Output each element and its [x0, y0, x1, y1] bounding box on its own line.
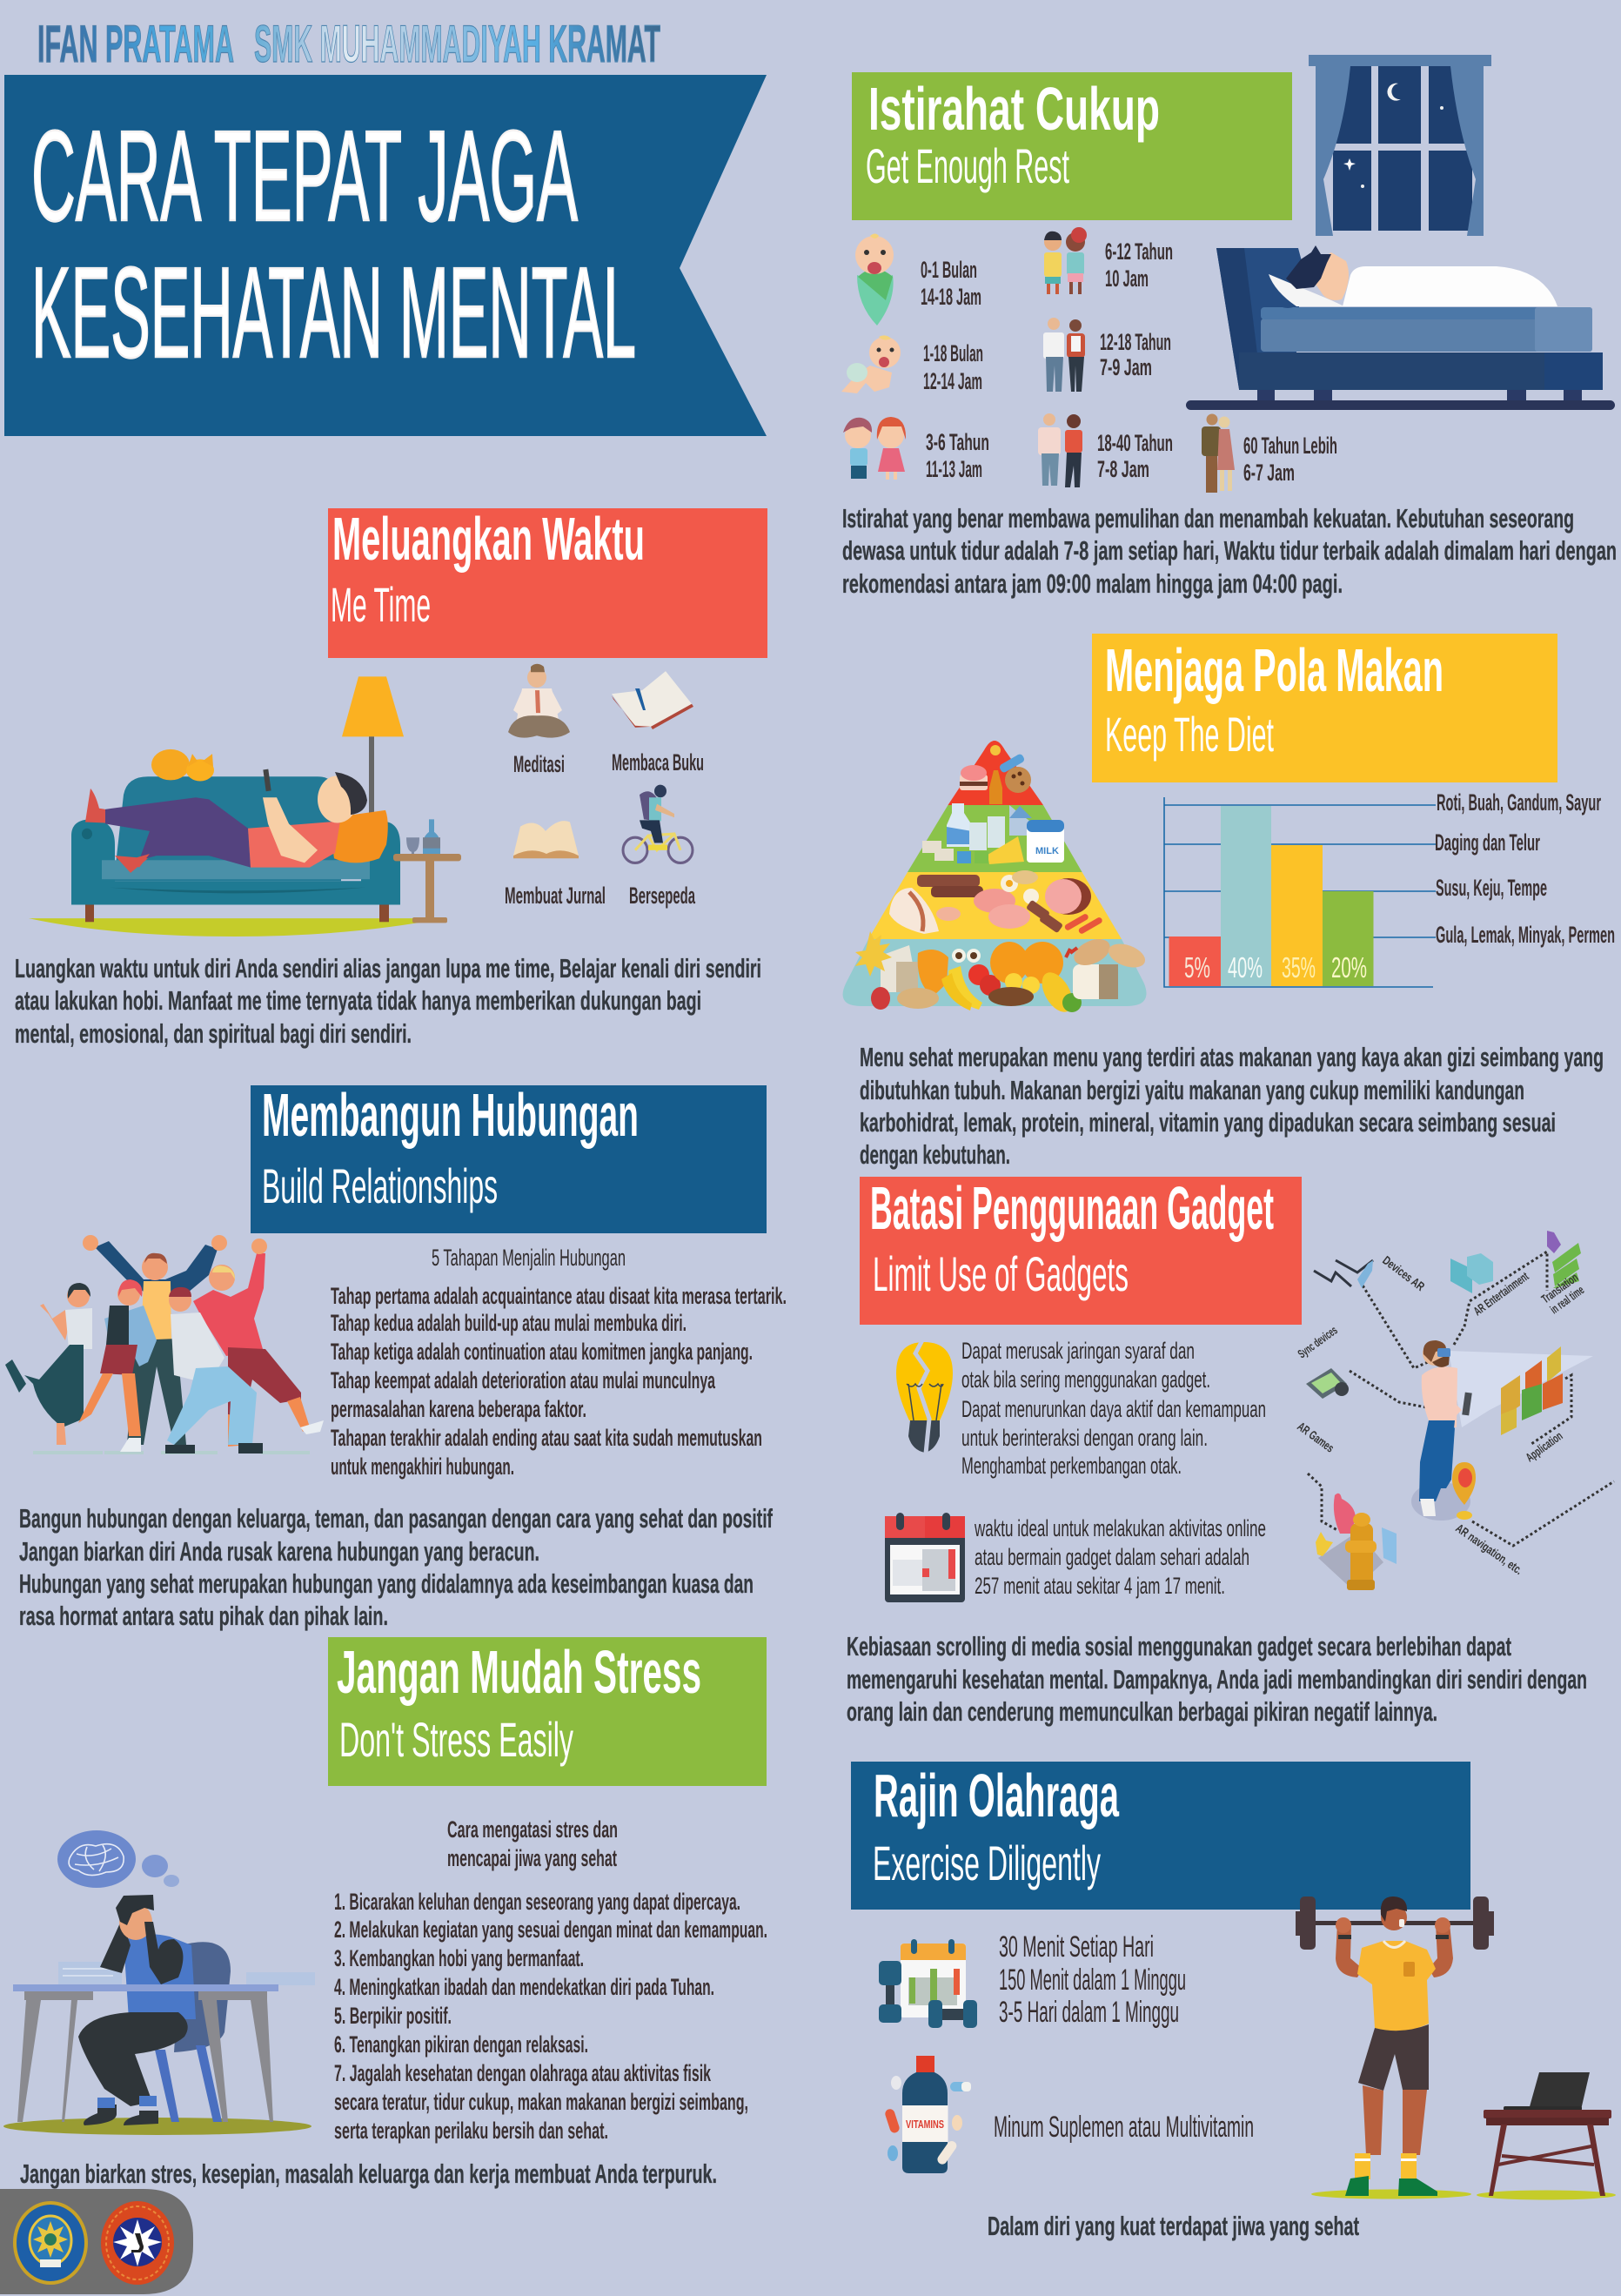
text: exercise frequency	[999, 1930, 1186, 2029]
heading: meluangkan waktu: Me Time	[331, 577, 431, 632]
AR labels: AR Games	[1295, 1419, 1337, 1455]
location pin	[1452, 1462, 1476, 1520]
bar: 5%: 5%	[1184, 951, 1210, 984]
chart labels: Daging dan Telur	[1435, 829, 1540, 856]
label: bersepeda: Bersepeda	[629, 883, 696, 909]
label: membuat jurnal: Membuat Jurnal	[505, 883, 606, 909]
icon: vitamin bottle	[884, 2056, 971, 2173]
paragraph: diet	[860, 1042, 1604, 1170]
text: ideal online time: waktu ideal untuk melakukan aktivitas online	[974, 1515, 1266, 1541]
application tiles	[1501, 1346, 1563, 1435]
list: stress tips: 1. Bicarakan keluhan dengan seseorang yang dapat dipercaya.	[334, 1889, 740, 1915]
age group: 1-18 bulan	[841, 335, 983, 394]
illustration: night window	[1309, 55, 1491, 236]
closing tagline: Dalam diri yang kuat terdapat jiwa yang sehat	[988, 2211, 1359, 2241]
icon: cyclist	[623, 785, 693, 863]
list: stress tips: 7. Jagalah kesehatan dengan olahraga atau aktivitas fisik	[334, 2060, 712, 2086]
illustration: sleeping person in bed	[1186, 245, 1615, 410]
text: gadget effects: Dapat menurunkan daya aktif dan kemampuan	[961, 1396, 1266, 1422]
illustration: stressed person at desk	[3, 1830, 315, 2135]
heading: batasi penggunaan gadget	[860, 1174, 1302, 1325]
age group: 60 tahun lebih	[1202, 414, 1337, 493]
illustration: weightlifter	[1296, 1897, 1494, 2199]
age group: 18-40 tahun: 18-40 Tahun	[1097, 430, 1173, 456]
age group: 12-18 tahun: 7-9 Jam	[1100, 354, 1152, 380]
age group: 3-6 tahun	[843, 417, 989, 482]
pink hair woman	[78, 1279, 157, 1452]
age group: 3-6 tahun: 11-13 Jam	[926, 456, 982, 482]
subheading: cara mengatasi	[447, 1816, 618, 1871]
heading: jangan mudah stress	[328, 1637, 767, 1786]
title banner: CARA TEPAT JAGA	[31, 104, 578, 248]
age group: 6-12 tahun: 10 Jam	[1105, 265, 1149, 292]
paragraph: rest	[842, 503, 1617, 599]
bar: 20%	[1323, 891, 1373, 986]
heading: menjaga pola makan	[1092, 634, 1557, 782]
paragraph: stress: Jangan biarkan stres, kesepian, masalah keluarga dan kerja membuat Anda terpuruk.	[20, 2158, 717, 2189]
bar: 35%: 35%	[1282, 951, 1316, 984]
age group: 6-12 tahun: 6-12 Tahun	[1105, 238, 1173, 265]
panel: exercise	[851, 1762, 1616, 2241]
top tier food	[960, 745, 1031, 804]
cap friend	[165, 1287, 263, 1453]
panel: diet	[843, 634, 1615, 1170]
panel: rest	[841, 55, 1617, 599]
logo: stikes	[13, 2201, 88, 2285]
age group: 18-40 tahun	[1038, 413, 1173, 487]
text: supplement: Minum Suplemen atau Multivitamin	[994, 2111, 1254, 2144]
icon: journal	[513, 821, 579, 858]
list: stress tips: serta terapkan perilaku bersih dan sehat.	[334, 2118, 608, 2144]
center man	[83, 1235, 227, 1445]
list: stress tips: secara teratur, tidur cukup, makan makanan bergizi seimbang,	[334, 2089, 748, 2115]
AR labels: AR Entertainment	[1470, 1269, 1531, 1318]
paragraph: relationships: Hubungan yang sehat merupakan hubungan yang didalamnya ada keseimbangan kuasa dan	[19, 1568, 754, 1599]
text: gadget effects: Dapat merusak jaringan syaraf dan	[961, 1338, 1195, 1364]
paragraph: me time: mental, emosional, dan spiritual bagi diri sendiri.	[15, 1018, 412, 1049]
logo panel	[0, 2189, 193, 2294]
subheading: 5 stages: 5 Tahapan Menjalin Hubungan	[432, 1245, 626, 1271]
panel: stress	[3, 1637, 767, 2189]
illustration: table and laptop	[1477, 2072, 1616, 2200]
bar: 20%: 20%	[1331, 951, 1367, 984]
panel: gadgets	[847, 1174, 1614, 1727]
panel: relationships	[5, 1081, 787, 1631]
author line	[37, 15, 660, 73]
age group: 1-18 bulan: 1-18 Bulan	[923, 340, 983, 366]
label: meditasi: Meditasi	[513, 751, 565, 777]
text: gadget effects	[961, 1338, 1266, 1479]
heading: membangun hubungan	[251, 1081, 767, 1233]
heading: membangun hubungan: Membangun Hubungan	[262, 1081, 639, 1149]
person with headset	[1411, 1340, 1472, 1521]
icon: schedule and dumbbells	[879, 1939, 977, 2028]
title banner: KESEHATAN MENTAL	[31, 241, 636, 385]
dairy tier food: MILK	[1035, 846, 1059, 856]
icon: vitamin bottle: VITAMINS	[906, 2118, 944, 2131]
list: relationship stages: untuk mengakhiri hubungan.	[331, 1453, 514, 1480]
paragraph: me time	[15, 953, 761, 1049]
age group: 0-1 bulan: 14-18 Jam	[921, 284, 981, 310]
subheading: cara mengatasi: mencapai jiwa yang sehat	[447, 1845, 617, 1871]
AR labels: in real time	[1547, 1283, 1586, 1316]
illustration: man on sofa	[29, 676, 461, 937]
chart labels	[1435, 789, 1615, 948]
age group: 12-18 tahun: 12-18 Tahun	[1100, 329, 1171, 355]
author line: SMK MUHAMMADIYAH KRAMAT	[254, 15, 660, 73]
paragraph: rest: rekomendasi antara jam 09:00 malam hingga jam 04:00 pagi.	[842, 568, 1343, 599]
list: stress tips: 2. Melakukan kegiatan yang sesuai dengan minat dan kemampuan.	[334, 1917, 767, 1943]
author line: IFAN PRATAMA	[37, 15, 234, 73]
icon: book	[612, 671, 693, 729]
subheading: cara mengatasi: Cara mengatasi stres dan	[447, 1816, 618, 1843]
heading: istirahat cukup	[852, 72, 1292, 220]
bar: 5%	[1169, 937, 1221, 986]
heading: istirahat cukup: Get Enough Rest	[866, 138, 1069, 193]
bar: 35%	[1271, 845, 1323, 986]
heading: menjaga pola makan: Keep The Diet	[1105, 707, 1274, 762]
base tier food	[855, 931, 1149, 1017]
age group: 60 tahun lebih: 60 Tahun Lebih	[1243, 433, 1337, 459]
age group: 3-6 tahun: 3-6 Tahun	[926, 429, 989, 455]
paragraph: diet: dengan kebutuhan.	[860, 1139, 1010, 1170]
text: ideal online time: atau bermain gadget dalam sehari adalah	[975, 1544, 1249, 1570]
list: relationship stages: Tahapan terakhir adalah ending atau saat kita sudah memutuskan	[331, 1425, 762, 1451]
age group: 0-1 bulan: 0-1 Bulan	[921, 257, 977, 283]
red hoodie friend	[193, 1239, 324, 1447]
list: relationship stages: Tahap keempat adalah deterioration atau mulai munculnya	[331, 1367, 716, 1393]
age group: 60 tahun lebih: 6-7 Jam	[1243, 460, 1295, 486]
illustration: food pyramid	[843, 741, 1149, 1017]
icon: broken light bulb	[896, 1340, 953, 1453]
heading: batasi penggunaan gadget: Limit Use of Gadgets	[873, 1246, 1129, 1301]
heading: istirahat cukup: Istirahat Cukup	[868, 75, 1160, 143]
list: stress tips: 4. Meningkatkan ibadah dan mendekatkan diri pada Tuhan.	[334, 1974, 714, 2000]
age group: 1-18 bulan: 12-14 Jam	[923, 368, 982, 394]
paragraph: relationships: Bangun hubungan dengan keluarga, teman, dan pasangan dengan cara yang sehat dan positif	[19, 1503, 773, 1534]
text: gadget effects: otak bila sering menggunakan gadget.	[961, 1366, 1210, 1393]
heading: membangun hubungan: Build Relationships	[262, 1158, 498, 1213]
AR labels: Translation	[1538, 1270, 1581, 1306]
list: relationship stages: Tahap pertama adalah acquaintance atau disaat kita merasa tertarik.	[331, 1283, 787, 1309]
list: relationship stages	[331, 1283, 787, 1480]
AR labels: Sync devices	[1295, 1323, 1340, 1360]
age group: 12-18 tahun	[1043, 318, 1171, 392]
heading: jangan mudah stress: Jangan Mudah Stress	[337, 1638, 701, 1706]
age group: 6-12 tahun	[1044, 227, 1173, 294]
list: stress tips	[334, 1889, 767, 2144]
text: ideal online time	[974, 1515, 1266, 1599]
text: gadget effects: untuk berinteraksi dengan orang lain.	[961, 1425, 1208, 1451]
text: gadget effects: Menghambat perkembangan otak.	[961, 1453, 1182, 1479]
bar: 40%	[1221, 806, 1271, 986]
heading: rajin olahraga: Rajin Olahraga	[874, 1762, 1120, 1829]
list: stress tips: 5. Berpikir positif.	[334, 2003, 452, 2029]
age group: 0-1 bulan	[855, 233, 981, 326]
left woman	[5, 1283, 92, 1445]
game hydrant and character	[1316, 1494, 1397, 1590]
bar chart: food portions	[1164, 789, 1615, 987]
icon: meditation	[508, 664, 570, 738]
paragraph: me time: atau lakukan hobi. Manfaat me time ternyata tidak hanya memberikan dukungan bagi	[15, 985, 701, 1016]
logo: smk muhammadiyah	[101, 2201, 174, 2285]
icon: calendar	[885, 1513, 965, 1602]
AR labels	[1295, 1253, 1586, 1577]
list: stress tips: 6. Tenangkan pikiran dengan relaksasi.	[334, 2031, 588, 2058]
text: exercise frequency: 3-5 Hari dalam 1 Minggu	[999, 1996, 1179, 2029]
paragraph: relationships: rasa hormat antara satu pihak dan pihak lain.	[19, 1601, 388, 1631]
phone and watch	[1306, 1368, 1349, 1399]
heading: meluangkan waktu: Meluangkan Waktu	[332, 505, 645, 573]
heading: jangan mudah stress: Don't Stress Easily	[339, 1712, 573, 1767]
AR labels: Devices AR	[1380, 1253, 1428, 1293]
paragraph: me time: Luangkan waktu untuk diri Anda sendiri alias jangan lupa me time, Belajar kenali diri sendiri	[15, 953, 761, 984]
heading: rajin olahraga	[851, 1762, 1470, 1910]
paragraph: gadgets	[847, 1631, 1587, 1727]
paragraph: relationships: Jangan biarkan diri Anda rusak karena hubungan yang beracun.	[19, 1536, 539, 1567]
bar: 40%: 40%	[1228, 951, 1263, 984]
heading: rajin olahraga: Exercise Diligently	[873, 1836, 1101, 1890]
label: membaca buku: Membaca Buku	[612, 749, 704, 775]
paragraph: relationships	[19, 1503, 773, 1631]
text: ideal online time: 257 menit atau sekitar 4 jam 17 menit.	[975, 1573, 1225, 1599]
list: relationship stages: Tahap ketiga adalah continuation atau komitmen jangka panjang.	[331, 1339, 753, 1365]
panel: me time	[15, 505, 767, 1049]
text: exercise frequency: 150 Menit dalam 1 Minggu	[999, 1964, 1186, 1997]
title banner	[4, 75, 767, 436]
dairy tier food	[922, 803, 1064, 864]
AR labels: AR navigation, etc.	[1453, 1521, 1525, 1577]
heading: meluangkan waktu	[328, 505, 767, 658]
list: relationship stages: Tahap kedua adalah build-up atau mulai membuka diri.	[331, 1310, 687, 1336]
illustration: group of friends	[5, 1235, 324, 1453]
hologram screens	[1450, 1231, 1581, 1293]
AR glasses	[1314, 1260, 1373, 1288]
list: stress tips: 3. Kembangkan hobi yang bermanfaat.	[334, 1945, 584, 1971]
AR labels: Application	[1523, 1428, 1565, 1464]
illustration: AR devices person	[1295, 1231, 1614, 1590]
age group: 18-40 tahun: 7-8 Jam	[1097, 456, 1149, 482]
text: exercise frequency: 30 Menit Setiap Hari	[999, 1930, 1154, 1964]
list: relationship stages: permasalahan karena beberapa faktor.	[331, 1396, 586, 1422]
protein tier food	[889, 870, 1103, 935]
